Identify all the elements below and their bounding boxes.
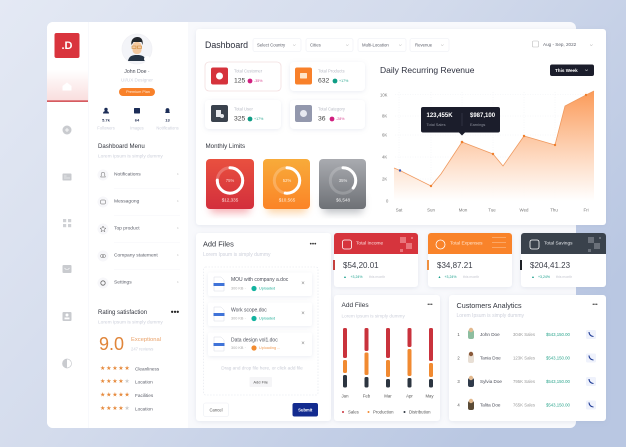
- stat card: total products: Total Products: [318, 68, 345, 74]
- submit button: Submit: [298, 408, 313, 412]
- menu item: messaging: ›: [177, 200, 179, 204]
- stat: images: Images: [130, 126, 144, 130]
- monthly limits heading: Monthly Limits: [206, 143, 245, 150]
- limit tile: orange: $10,565: [279, 198, 296, 202]
- card: total expenses: Total Expenses: [450, 240, 483, 246]
- card: total expenses: this month: [463, 275, 479, 279]
- customer row: Sylvia Doe: 3: [457, 379, 460, 384]
- file row: work scope: ×: [301, 311, 305, 317]
- menu item: notifications: Notifications: [114, 172, 141, 178]
- line chart: daily revenue: Tue: [488, 208, 496, 212]
- card: total savings: ▲: [531, 275, 535, 279]
- stat: notifications: Notifications: [156, 126, 179, 130]
- menu item: settings: ›: [177, 280, 179, 286]
- customer row: Sylvia Doe: 795K Sales: [513, 379, 535, 384]
- chart tooltip: $987,100: [470, 113, 496, 119]
- stat card: total customer: -35%: [254, 79, 263, 83]
- filter: cities: [306, 38, 353, 52]
- month labels: Apr: [406, 394, 413, 398]
- stat card: total user: Total User: [234, 106, 253, 112]
- limit tile: red: 75%: [226, 178, 234, 183]
- limit tile: orange: 52%: [283, 178, 291, 183]
- stat: followers: [97, 108, 115, 130]
- add files heading: Add Files: [203, 240, 234, 248]
- rating score: 9.0: [99, 334, 124, 354]
- filter: country: [253, 38, 301, 52]
- line chart: daily revenue: 10K: [380, 92, 388, 98]
- logo: .D: [62, 40, 73, 52]
- customer row: Sylvia Doe: $543,150.00: [546, 379, 571, 384]
- card: total savings: this month: [556, 275, 572, 279]
- line chart: daily revenue: 2K: [382, 176, 387, 182]
- customer row: John Doe: 1: [457, 332, 460, 337]
- icon: grid: [63, 219, 71, 227]
- customer row: John Doe: John Doe: [480, 332, 500, 337]
- customer row: Sylvia Doe: Sylvia Doe: [480, 379, 502, 384]
- menu item: company statement: [98, 250, 179, 262]
- legend: [342, 410, 431, 414]
- file row: data design: ×: [301, 341, 305, 347]
- line chart: daily revenue: Thu: [550, 208, 558, 212]
- file row: MOU: ×: [301, 281, 305, 287]
- rating row: location: [100, 378, 153, 385]
- customer row: John Doe: 304K Sales: [513, 332, 535, 337]
- dashboard menu heading: Dashboard Menu: [98, 143, 145, 150]
- limit tile: red: [206, 159, 254, 213]
- dropzone: [204, 267, 318, 395]
- card: total income: ▲: [343, 275, 347, 279]
- customer row: Tania Doe: Tania Doe: [480, 356, 501, 360]
- menu item: top product: ›: [177, 226, 179, 232]
- chart heading: Add Files: [342, 302, 369, 309]
- rating row: facilities: Facilities: [135, 393, 154, 398]
- rating heading: Rating satisfaction: [98, 310, 147, 316]
- customer row: Talita Doe: $543,150.00: [546, 402, 571, 408]
- chart tooltip: 123,455K: [426, 113, 453, 119]
- file row: data design: Uploading ...: [259, 346, 280, 350]
- customer row: Talita Doe: 4: [457, 402, 460, 408]
- stat card: total category: -28%: [336, 117, 345, 121]
- rating row: location 2: ★★★★★: [100, 405, 130, 412]
- menu item: notifications: ›: [177, 172, 179, 178]
- file row: MOU: MOU with company a.doc: [231, 277, 289, 283]
- file row: MOU: 300 KB ·: [231, 286, 246, 290]
- customer row: Tania Doe: 123K Sales: [513, 356, 535, 360]
- limit tile: grey: [319, 159, 366, 213]
- user role: UI/UX Designer: [121, 78, 153, 82]
- stat card: total category: [290, 100, 365, 129]
- date picker: Aug - Sep, 2022: [543, 42, 577, 47]
- stat: images: 64: [135, 118, 140, 122]
- line chart: daily revenue: Fri: [583, 208, 589, 212]
- line chart: daily revenue: Sun: [427, 208, 435, 212]
- rating row: cleanliness: [100, 365, 160, 372]
- stat: followers: Followers: [97, 126, 115, 130]
- chart subtitle: Lorem Ipsum is simply dummy: [342, 314, 405, 318]
- stat card: total customer: Total Customer: [234, 68, 263, 74]
- stat card: total user: 325: [234, 116, 246, 122]
- avatar: [122, 34, 152, 64]
- this week button: [550, 64, 594, 76]
- card: total expenses: ▲: [438, 275, 441, 279]
- filter: location: Multi-Location: [362, 42, 389, 48]
- chart tooltip: Total Sales: [426, 122, 446, 127]
- card: total income: [333, 233, 418, 287]
- stat: followers: 5.7k: [102, 118, 111, 122]
- user name: John Doe ·: [124, 69, 150, 75]
- file row: MOU: Uploaded: [259, 286, 275, 290]
- stat card: total products: +17%: [339, 79, 349, 83]
- rating label: [131, 337, 161, 352]
- limit tile: red: $12,335: [222, 198, 239, 202]
- rating row: location: ★★★★★: [100, 378, 130, 385]
- icon: contact: [62, 312, 72, 321]
- stacked bars: [343, 328, 433, 388]
- icon: add: [62, 126, 72, 134]
- stat: notifications: 13: [165, 118, 170, 122]
- month labels: Jan: [342, 394, 349, 398]
- icon: card: [62, 174, 72, 180]
- filter: cities: Cities: [310, 42, 321, 48]
- cancel button: Cancel: [209, 408, 223, 412]
- chart tooltip: [421, 107, 500, 136]
- dashboard title: Dashboard: [205, 40, 248, 50]
- menu item: notifications: [98, 170, 179, 180]
- line chart: daily revenue: Wed: [520, 208, 529, 212]
- menu item: settings: Settings: [114, 280, 132, 286]
- month labels: [342, 394, 434, 398]
- filter: location: [358, 38, 406, 52]
- card: total savings: +3,24%: [538, 275, 550, 279]
- rating row: cleanliness: Cleanliness: [135, 366, 160, 372]
- card: total expenses: +3,24%: [444, 275, 456, 279]
- icon: contrast: [62, 359, 72, 368]
- file row: work scope: Uploaded: [259, 316, 275, 320]
- card: total savings: Total Savings: [544, 240, 573, 246]
- limit tile: grey: $6,548: [336, 198, 350, 202]
- panel: customers analytics: [449, 295, 606, 421]
- rating row: location 2: [100, 405, 153, 412]
- line chart: daily revenue: 4K: [382, 154, 387, 160]
- cancel button: [204, 403, 228, 416]
- customer row: Tania Doe: [457, 352, 596, 363]
- stat card: total customer: [205, 62, 281, 91]
- customers heading: Customers Analytics: [456, 301, 522, 310]
- menu item: top product: [98, 224, 179, 234]
- card: total income: $54,20.01: [343, 261, 379, 270]
- profile sidebar: [89, 22, 188, 428]
- customers subtitle: Lorem Ipsum is simply dummy: [456, 313, 525, 319]
- rating label: Exceptional: [131, 337, 161, 343]
- rating row: facilities: [100, 392, 154, 398]
- card: total expenses: [427, 233, 512, 287]
- menu subtitle: Lorem Ipsum is simply dummy: [98, 154, 163, 160]
- logo: [54, 33, 80, 58]
- menu item: company statement: ›: [177, 254, 179, 258]
- line chart: daily revenue: 0: [386, 198, 389, 204]
- customer row: John Doe: [457, 328, 596, 339]
- stat: images: [130, 108, 144, 130]
- add files subtitle: Lorem Ipsum is simply dummy: [203, 252, 271, 258]
- active home tab: [47, 70, 88, 102]
- rating row: location 2: Location: [135, 406, 153, 412]
- file row: data design: [208, 332, 312, 356]
- card: total expenses: $34,87.21: [437, 261, 473, 270]
- customer row: Tania Doe: 2: [457, 356, 460, 360]
- stat card: total user: [205, 100, 281, 129]
- customer row: John Doe: $543,150.00: [546, 332, 571, 337]
- menu item: settings: [98, 278, 179, 288]
- stat card: total customer: 125: [234, 78, 246, 84]
- customer row: Talita Doe: 765K Sales: [513, 402, 535, 408]
- file row: data design: Data design vol1.doc: [231, 338, 278, 344]
- chart menu dots: •••: [427, 302, 433, 308]
- menu item: messaging: Messagong: [114, 198, 140, 204]
- customer row: Tania Doe: $543,150.00: [546, 356, 571, 360]
- legend: Distribution: [409, 410, 431, 414]
- filter: revenue: [410, 38, 449, 52]
- rating row: cleanliness: ★★★★★: [100, 365, 130, 372]
- customers menu dots: •••: [592, 302, 598, 308]
- premium badge: Premium Plan: [126, 90, 150, 94]
- stat card: total category: 36: [318, 116, 326, 122]
- file row: data design: 300 KB ·: [231, 346, 246, 350]
- customer row: Sylvia Doe: [457, 376, 596, 387]
- customer row: Talita Doe: Talita Doe: [480, 402, 501, 408]
- legend: Production: [373, 410, 394, 414]
- premium badge: [119, 88, 155, 96]
- month labels: May: [425, 394, 434, 398]
- file row: work scope: [208, 302, 312, 326]
- file row: work scope: 300 KB ·: [231, 316, 246, 320]
- submit button: [292, 403, 318, 416]
- panel: dashboard overview: [196, 29, 606, 225]
- filter: country: Select Country: [257, 42, 286, 48]
- menu item: top product: Top product: [114, 226, 140, 232]
- stat card: total products: [290, 62, 365, 91]
- card: total savings: $204,41.23: [530, 261, 571, 270]
- chart title: Daily Recurring Revenue: [380, 65, 475, 75]
- stat: notifications: [156, 108, 179, 130]
- card: total savings: [520, 233, 606, 287]
- icon sidebar: [47, 22, 88, 428]
- line chart: daily revenue: 6K: [382, 132, 387, 138]
- legend: Sales: [348, 410, 359, 414]
- date picker: [532, 41, 593, 47]
- limit tile: grey: 35%: [339, 178, 347, 183]
- card: total income: +3,24%: [350, 275, 362, 279]
- stat card: total user: +17%: [254, 117, 264, 121]
- rating row: location: Location: [135, 380, 153, 384]
- panel: add files: [196, 233, 331, 421]
- line chart: daily revenue: Mon: [459, 208, 468, 212]
- drop instructions: Drag and drop file here, or click add file: [221, 366, 303, 370]
- stat card: total category: Total Category: [318, 106, 346, 112]
- this week button: This Week: [555, 68, 578, 73]
- chart tooltip: Earnings: [470, 122, 485, 127]
- customer row: Talita Doe: [457, 399, 596, 410]
- rating row: facilities: ★★★★★: [100, 392, 130, 398]
- limit tile: orange: [263, 159, 310, 213]
- rating menu dots: •••: [171, 308, 179, 316]
- line chart: daily revenue: Sat: [396, 208, 403, 212]
- card: total income: Total Income: [356, 240, 384, 246]
- menu item: company statement: Company statement: [114, 252, 158, 258]
- stat card: total products: 632: [318, 78, 330, 84]
- main window panel: [47, 22, 576, 428]
- menu item: messaging: [98, 196, 179, 208]
- rating subtitle: Lorem Ipsum is simply dummy: [98, 320, 163, 326]
- line chart: daily revenue: 8K: [382, 114, 387, 118]
- filter: revenue: Revenue: [415, 42, 433, 48]
- month labels: Mar: [384, 394, 392, 398]
- month labels: Feb: [363, 394, 371, 398]
- file row: MOU: [208, 272, 312, 296]
- panel: add files bar chart: [334, 295, 440, 421]
- card: total income: this month: [369, 275, 385, 279]
- icon: inbox: [62, 265, 72, 273]
- line chart: daily revenue: [380, 91, 594, 212]
- file row: work scope: Work scope.doc: [231, 308, 267, 314]
- rating label: 247 reviews: [131, 346, 153, 352]
- menu dots: •••: [310, 241, 317, 248]
- add file button: Add File: [253, 380, 269, 384]
